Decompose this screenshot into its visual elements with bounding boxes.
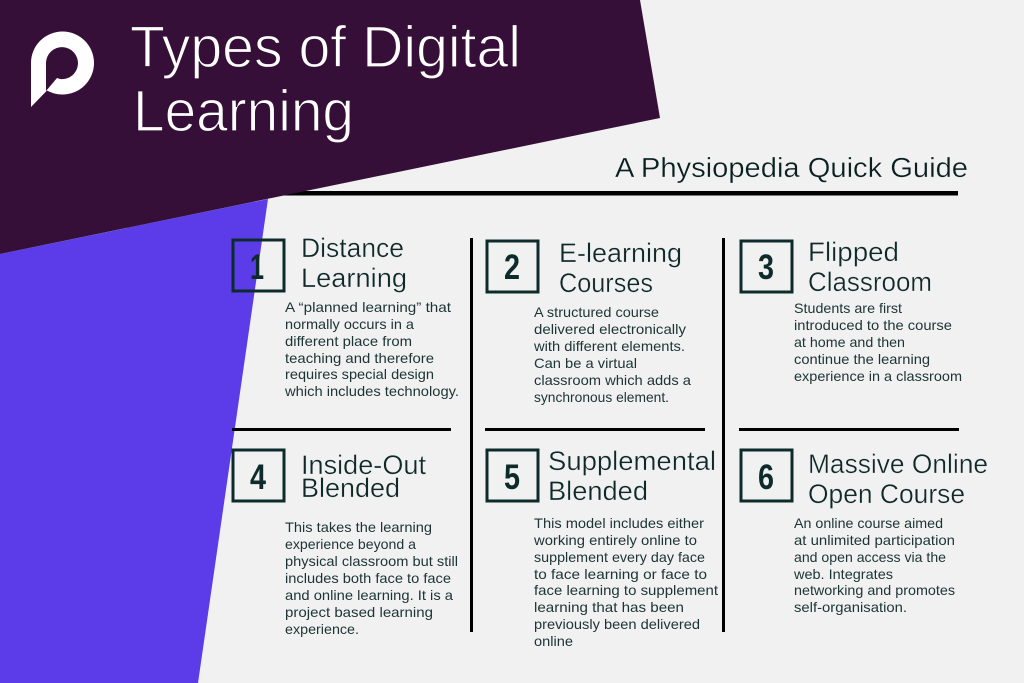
panel: 2 E-learning Courses: [487, 238, 691, 405]
text: Inside-Out Blended description: project based learning: [285, 604, 433, 620]
title: Types of Digital: [130, 15, 521, 80]
heading: Massive Online Open Course: Open Course: [808, 479, 965, 509]
text: Inside-Out Blended description: [285, 519, 458, 637]
icon: Physiopedia logo: [31, 32, 94, 107]
text: Supplemental Blended description: previously been delivered: [534, 616, 700, 632]
text: Massive Online Open Course description: networking and promotes: [794, 582, 955, 598]
text: Distance Learning description: teaching and therefore: [285, 350, 434, 366]
heading: Supplemental Blended: Supplemental: [548, 446, 716, 476]
panel: 3 Flipped Classroom: [741, 237, 962, 384]
heading: Supplemental Blended: [548, 446, 716, 506]
text: E-learning Courses description: [533, 304, 691, 405]
text: Massive Online Open Course description: An online course aimed: [794, 515, 943, 531]
panel: 4 Inside-Out Blended: [233, 450, 458, 637]
subtitle: A Physiopedia Quick Guide: [615, 152, 968, 183]
number box 5: [487, 450, 538, 501]
number box 2: [487, 241, 538, 292]
text: Flipped Classroom description: experience in a classroom: [794, 368, 962, 384]
heading: Flipped Classroom: Classroom: [808, 267, 932, 297]
text: E-learning Courses description: classroom which adds a: [534, 372, 691, 388]
text: Supplemental Blended description: working entirely online to: [533, 532, 697, 548]
heading: E-learning Courses: Courses: [559, 268, 653, 298]
header rule: [280, 191, 958, 196]
panel: 1 Distance Learning: [233, 233, 459, 399]
heading: E-learning Courses: [559, 238, 682, 298]
heading: Inside-Out Blended: Inside-Out: [301, 450, 426, 480]
number box 6: 6: [758, 458, 774, 497]
text: Distance Learning description: requires special design: [285, 366, 434, 382]
panel: 6 Massive Online Open Course: [741, 449, 988, 615]
number box 3: 3: [758, 248, 774, 287]
text: Inside-Out Blended description: experience beyond a: [285, 536, 416, 552]
text: Supplemental Blended description: This model includes either: [534, 515, 704, 531]
heading: Distance Learning: [301, 233, 407, 293]
number box 1: [233, 240, 284, 291]
heading: Massive Online Open Course: [808, 449, 988, 509]
text: Massive Online Open Course description: self-organisation.: [794, 599, 907, 615]
title: [130, 15, 521, 144]
text: Inside-Out Blended description: and online learning. It is a: [285, 587, 453, 603]
text: Supplemental Blended description: [533, 515, 718, 649]
heading: Inside-Out Blended: Blended: [301, 473, 400, 503]
text: E-learning Courses description: Can be a virtual: [534, 355, 637, 371]
text: Distance Learning description: normally occurs in a: [285, 316, 414, 332]
text: Supplemental Blended description: supplement every day face: [534, 549, 705, 565]
number box 1: 1: [250, 248, 264, 287]
text: Supplemental Blended description: online: [534, 633, 573, 649]
text: Massive Online Open Course description: and open access via the: [794, 549, 946, 565]
text: Inside-Out Blended description: experience.: [285, 621, 359, 637]
text: E-learning Courses description: A structured course: [534, 304, 659, 320]
heading: Massive Online Open Course: Massive Online: [808, 449, 988, 479]
text: Flipped Classroom description: continue the learning: [794, 351, 930, 367]
text: Supplemental Blended description: to face learning or face to: [534, 566, 707, 582]
number box 4: [233, 450, 284, 501]
text: Distance Learning description: A “planned learning” that: [285, 299, 451, 315]
heading: Distance Learning: Distance: [301, 233, 404, 263]
number box 2: 2: [504, 248, 520, 287]
text: E-learning Courses description: with different elements.: [533, 338, 685, 354]
text: Flipped Classroom description: Students are first: [794, 300, 902, 316]
dark header panel: [0, 0, 660, 254]
text: Flipped Classroom description: introduced to the course: [794, 317, 952, 333]
text: Massive Online Open Course description: [793, 515, 955, 615]
heading: Distance Learning: Learning: [301, 263, 407, 293]
heading: Flipped Classroom: Flipped: [808, 237, 899, 267]
text: Inside-Out Blended description: includes both face to face: [285, 570, 451, 586]
number box 6: [741, 450, 792, 501]
text: Supplemental Blended description: face learning to supplement: [534, 582, 718, 598]
text: Flipped Classroom description: [794, 300, 962, 384]
title: Learning: [133, 79, 354, 144]
column dividers: [232, 238, 959, 632]
heading: Flipped Classroom: [808, 237, 932, 297]
text: Supplemental Blended description: learning that has been: [534, 599, 684, 615]
number box 4: 4: [250, 458, 266, 497]
text: Inside-Out Blended description: This takes the learning: [285, 519, 432, 535]
text: Distance Learning description: [284, 299, 459, 399]
heading: Inside-Out Blended: [301, 450, 426, 503]
text: E-learning Courses description: synchronous element.: [534, 389, 669, 405]
panel: 5 Supplemental Blended: [487, 446, 718, 649]
text: Massive Online Open Course description: at unlimited participation: [794, 532, 955, 548]
text: Flipped Classroom description: at home and then: [794, 334, 905, 350]
purple background shape: [0, 199, 268, 683]
heading: Supplemental Blended: Blended: [548, 476, 648, 506]
text: Massive Online Open Course description: web. Integrates: [793, 566, 893, 582]
text: Distance Learning description: different place from: [285, 333, 412, 349]
heading: E-learning Courses: E-learning: [559, 238, 682, 268]
number box 3: [741, 241, 792, 292]
number box 5: 5: [504, 458, 520, 497]
text: Distance Learning description: which includes technology.: [284, 383, 459, 399]
text: E-learning Courses description: delivered electronically: [534, 321, 686, 337]
text: Inside-Out Blended description: physical classroom but still: [285, 553, 458, 569]
